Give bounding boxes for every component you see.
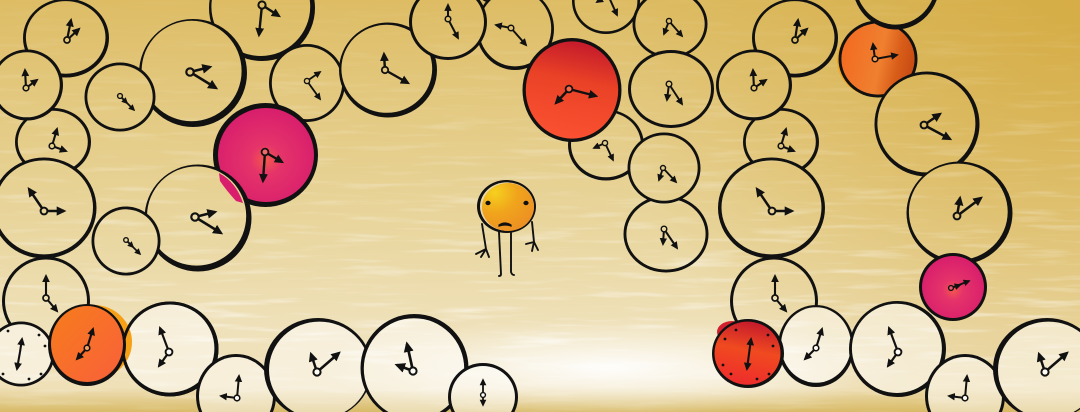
clock: top arch left xyxy=(409,0,487,60)
clock: red dial with dots xyxy=(712,319,784,388)
clock: bottom large centre xyxy=(360,314,468,412)
figure head xyxy=(477,180,536,233)
figure face xyxy=(485,201,529,226)
clock: bottom small xyxy=(196,354,276,412)
clock: small with overlapping hands xyxy=(84,62,156,132)
clock outline redrawn above the spill xyxy=(123,303,217,395)
clock: large upper left xyxy=(139,19,247,127)
clock: bottom left large white xyxy=(122,302,218,396)
clock: bottom right small xyxy=(925,354,1005,412)
clock: bottom large centre-left xyxy=(264,318,372,412)
paint: pink bleed over neighbour xyxy=(219,173,243,203)
clock: upper left small xyxy=(15,108,91,176)
clock: large beside top arch xyxy=(339,22,437,118)
clock: small below left xyxy=(92,206,160,276)
clock: bottom right large white xyxy=(849,301,946,397)
clock: top centre partial xyxy=(572,0,640,34)
clock: lower stack middle xyxy=(628,132,700,204)
clock: large lower left xyxy=(144,164,252,272)
clock: lower centre right medium xyxy=(730,256,818,346)
clock: partial arc top xyxy=(477,0,507,3)
clock: right of red xyxy=(628,50,714,128)
clock: top arch right xyxy=(476,0,554,70)
clock: right group top xyxy=(752,0,838,78)
clock: top right partial xyxy=(852,0,940,30)
clock: red highlighted xyxy=(522,38,622,142)
clock: lower stack bottom xyxy=(624,196,708,272)
clock: bottom small centre xyxy=(448,363,518,412)
clock: centre right large xyxy=(718,158,825,258)
paint: orange spill behind clock xyxy=(56,305,132,379)
clock: pink highlighted large xyxy=(213,103,318,207)
clock: white medium beside red dial xyxy=(778,305,854,387)
clock: upper top centre-left xyxy=(209,0,315,61)
clock: left edge xyxy=(0,50,63,120)
figure: worried orange character xyxy=(476,180,538,276)
clock: far left large xyxy=(0,158,96,258)
clock: upper centre-left medium xyxy=(269,44,345,122)
clock: bottom white with dial dots xyxy=(0,322,54,386)
clock: lower left medium xyxy=(2,256,90,346)
clock: right large lower xyxy=(906,162,1012,264)
clock: orange highlighted lower left xyxy=(48,304,126,386)
clock: right group left xyxy=(716,50,792,120)
clock: right group lower small xyxy=(743,108,819,176)
clock: top row far left xyxy=(23,0,109,78)
clock: pink highlighted small xyxy=(919,253,987,321)
clock: right large upper xyxy=(874,72,980,176)
clock: bottom far right large xyxy=(993,318,1080,412)
clock: top right of arch xyxy=(632,0,708,58)
figure legs and arms xyxy=(476,222,538,276)
clock: lower right of red xyxy=(568,110,644,180)
clock: orange highlighted xyxy=(837,20,918,98)
